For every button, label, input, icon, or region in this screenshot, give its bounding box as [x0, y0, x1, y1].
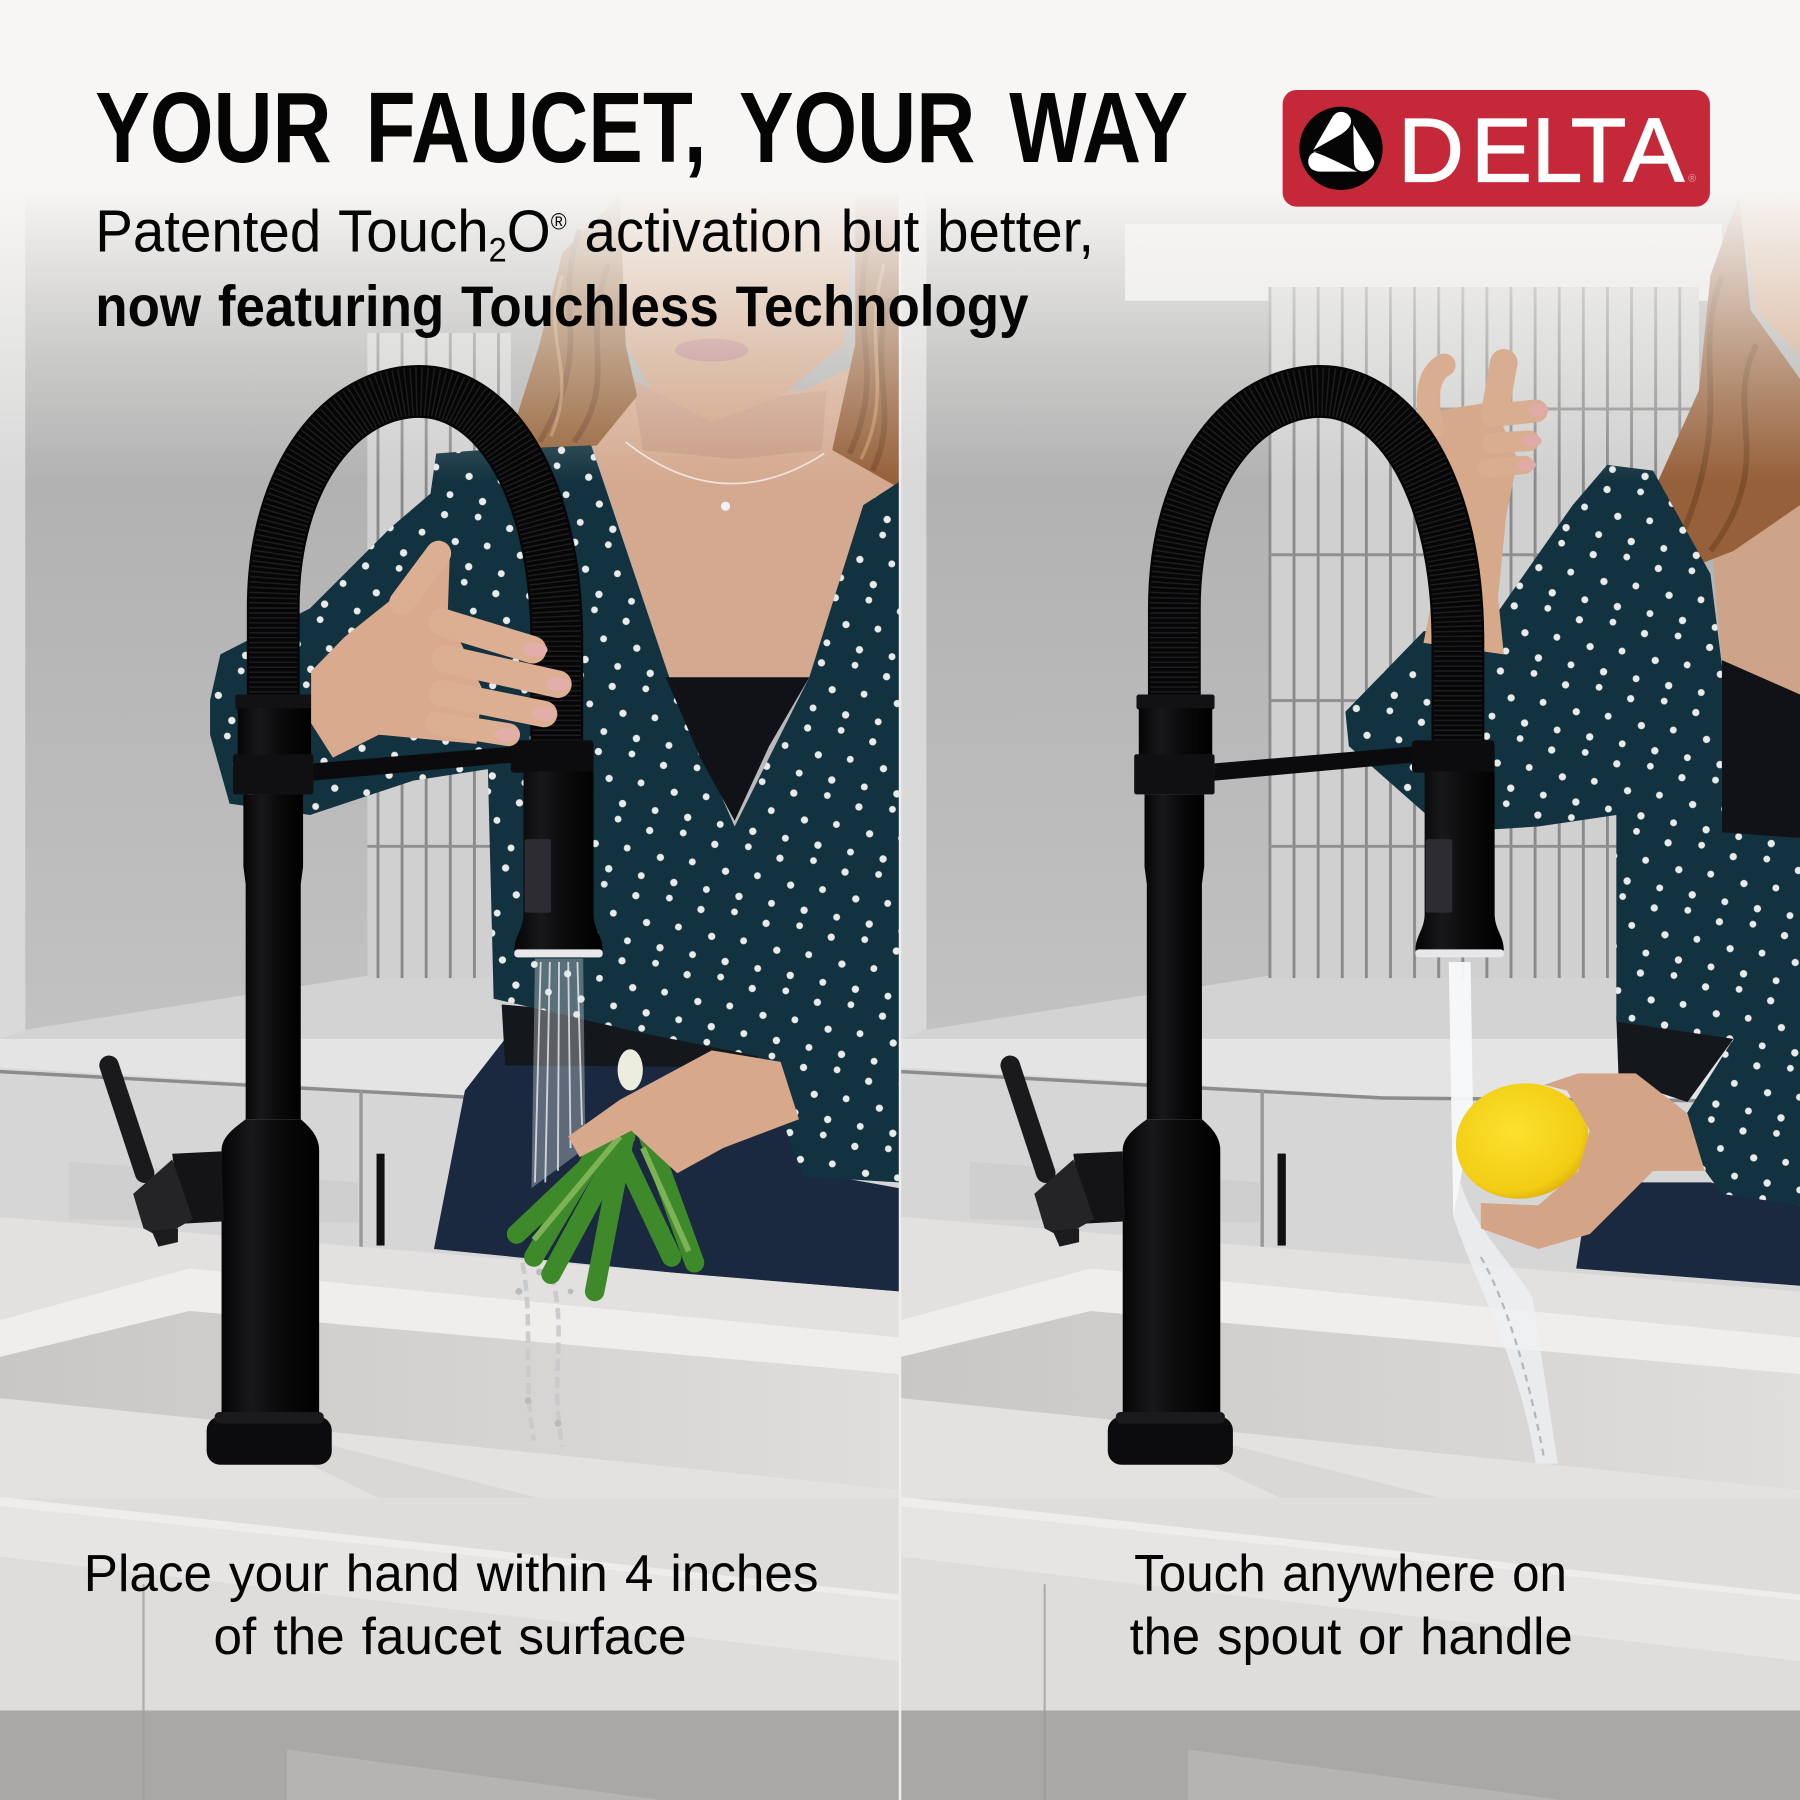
- panel: right kitchen scene: [901, 0, 1800, 1297]
- caption left: [84, 1544, 818, 1665]
- icon: left hand near faucet: [311, 549, 571, 758]
- person: right woman: [1345, 195, 1800, 1286]
- cabinet handle right: [1278, 1154, 1286, 1246]
- logo wordmark: DELTA: [1398, 100, 1684, 202]
- caption left: of the faucet surface: [214, 1607, 686, 1665]
- caption right: [1130, 1544, 1573, 1665]
- water stream right: [1449, 962, 1558, 1464]
- subheading line 1: O: [507, 197, 551, 264]
- top white fade: [0, 0, 1800, 482]
- panel divider: [899, 0, 901, 1800]
- lemon and hand right: [1447, 962, 1705, 1464]
- caption right: Touch anywhere on: [1134, 1544, 1567, 1602]
- counter section right: [1268, 978, 1619, 987]
- left faucet: [109, 391, 603, 1465]
- tile backsplash right: [1268, 287, 1699, 983]
- green onions and hand: [517, 1049, 799, 1291]
- countertop and sink left: [0, 1217, 899, 1800]
- caption left: Place your hand within 4 inches: [84, 1544, 818, 1602]
- tile backsplash left: [367, 333, 511, 978]
- person: left woman: [210, 195, 899, 1291]
- upper cabinet right: [1125, 224, 1722, 301]
- subheading line 1: Patented Touch: [95, 197, 511, 264]
- subheading line 1: activation but better,: [567, 197, 1094, 264]
- icon: Delta triangle mark: [1299, 107, 1383, 190]
- registered mark: ®: [1688, 173, 1696, 185]
- logo: Delta: [1283, 90, 1710, 207]
- subheading line 2: now featuring Touchless Technology: [95, 275, 1029, 339]
- title: YOUR FAUCET, YOUR WAY: [95, 73, 1188, 184]
- subheading line 1: 2: [489, 232, 507, 270]
- water spray left: [515, 959, 585, 1446]
- countertop and sink right: [901, 1217, 1800, 1800]
- right faucet: [1010, 391, 1504, 1465]
- hand raised on right: [1423, 363, 1549, 654]
- subheading line 1: ®: [551, 209, 567, 235]
- panel: left kitchen scene: [0, 0, 899, 1297]
- caption right: the spout or handle: [1130, 1607, 1573, 1665]
